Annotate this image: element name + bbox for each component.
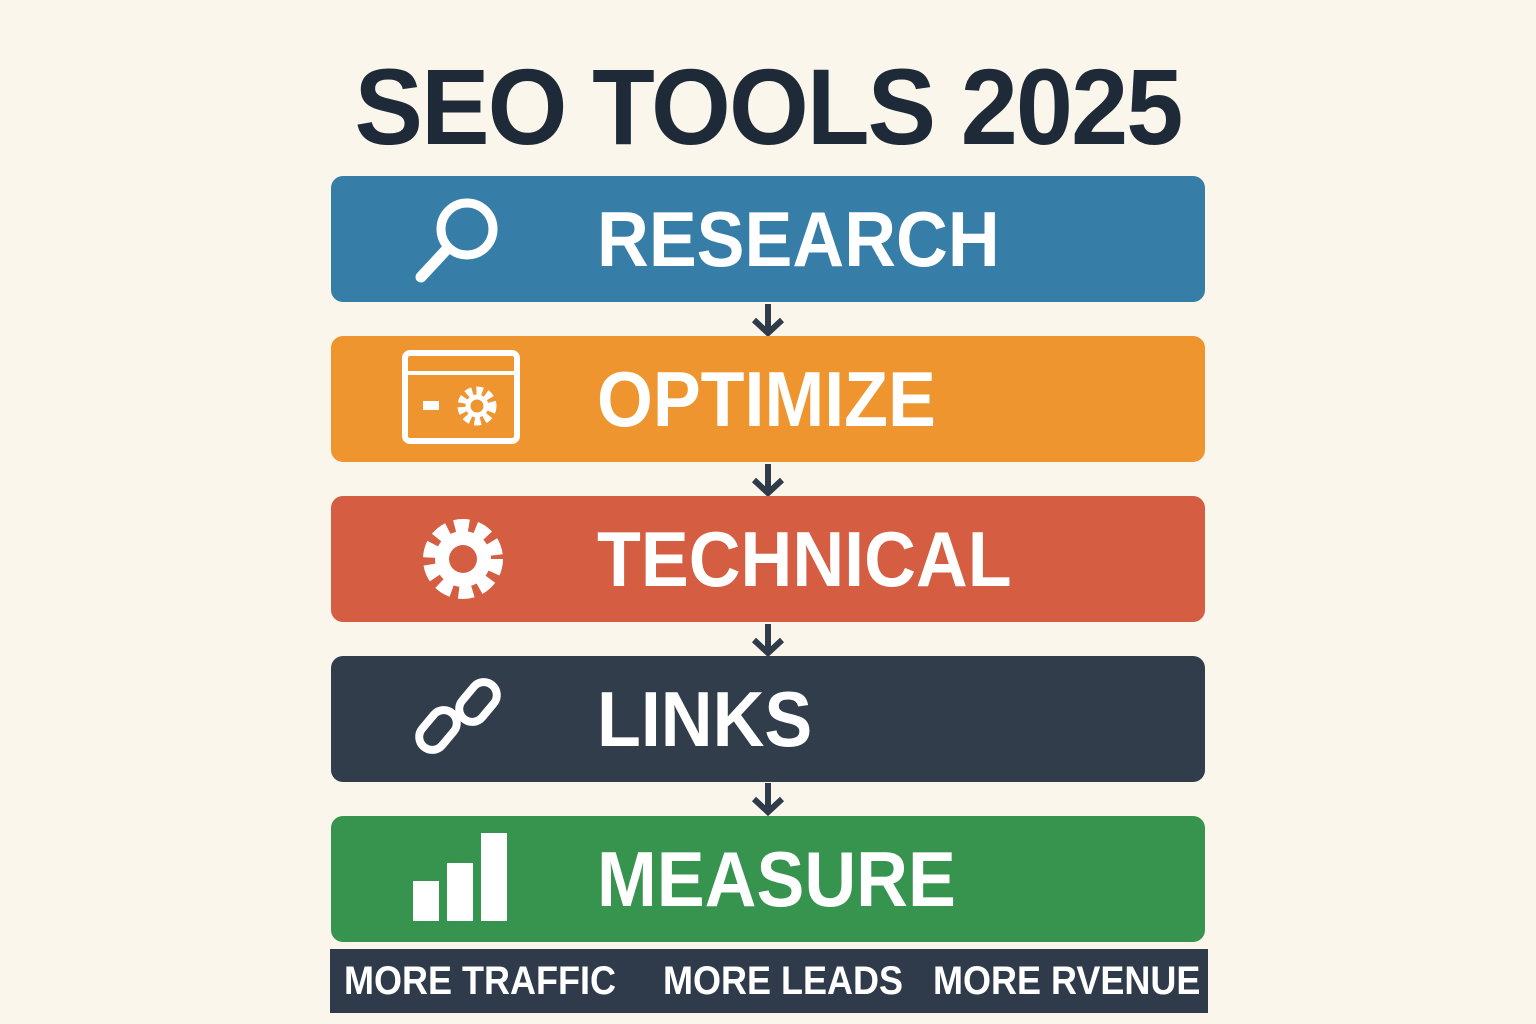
panel: research [331, 176, 1205, 302]
label: MEASURE [597, 835, 956, 923]
arrow [752, 783, 784, 816]
panel: optimize [331, 336, 1205, 462]
arrow [752, 624, 784, 656]
icon: gear [423, 519, 503, 599]
arrow [752, 464, 784, 496]
icon: magnifier [416, 198, 498, 282]
outcome strip [330, 949, 1208, 1013]
panel: technical [331, 496, 1205, 622]
arrow [752, 304, 784, 336]
panel: measure [331, 816, 1205, 942]
label: LINKS [597, 675, 812, 763]
icon: chain link [415, 678, 501, 754]
label: OPTIMIZE [597, 355, 936, 443]
panel: links [331, 656, 1205, 782]
icon: browser gear [402, 350, 520, 444]
label: TECHNICAL [597, 515, 1012, 603]
label: RESEARCH [597, 195, 1000, 283]
title: SEO TOOLS 2025 [355, 46, 1181, 167]
icon: bar chart [413, 833, 507, 921]
outcome strip: MORE TRAFFIC [344, 959, 616, 1003]
outcome strip: MORE LEADS [663, 959, 903, 1003]
outcome strip: MORE RVENUE [933, 959, 1200, 1003]
